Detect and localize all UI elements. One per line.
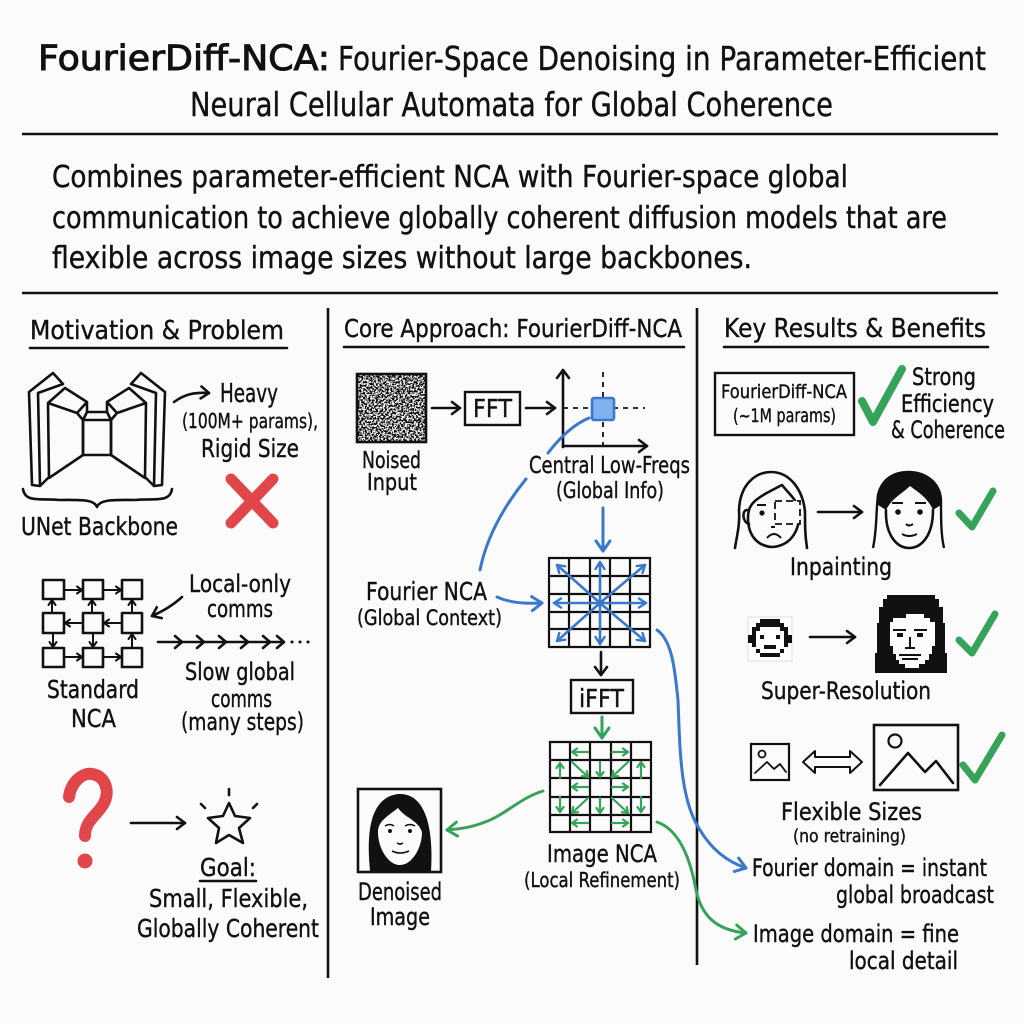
arrow [600,652,602,675]
summary text [52,160,947,276]
label: UNet Backbone: UNet Backbone [21,512,178,541]
callout: slow global comms: (many steps) [181,708,304,736]
callout: local-only comms [189,570,291,623]
box: FFT [465,392,520,425]
icon: check [959,491,993,527]
icon: red question mark [69,774,107,868]
summary text: flexible across image sizes without large backbones. [52,241,752,276]
goal text [137,853,319,943]
arrow [600,717,604,738]
label: Fourier NCA [357,577,502,630]
text: strong efficiency and coherence: Strong [912,363,976,391]
image: denoised portrait [358,789,441,872]
arrow [810,636,855,638]
callout: local-only comms: Local-only [189,570,291,598]
callout: slow global comms: comms [211,685,272,713]
arrow [432,407,460,409]
label: noised input: Noised [362,448,421,474]
callout: Image domain: local detail [849,947,958,975]
label: Fourier NCA: Fourier NCA [366,577,487,606]
callout: Image domain [753,920,959,975]
heading: core approach: Core Approach: FourierDiff-NCA [344,314,682,343]
label: noised input [362,448,421,496]
icon: check [963,735,1002,780]
image: noised input [357,374,426,442]
icon: pixel face high resolution [875,595,947,673]
label: central low-freqs [529,453,690,504]
heading: motivation and problem: Motivation & Problem [30,316,284,346]
arrow [818,511,862,513]
heading: key results: Key Results & Benefits [724,314,986,344]
icon: UNet backbone [23,373,172,507]
title: FourierDiff-NCA: [38,39,330,79]
chart: frequency axes [563,370,647,447]
label: Fourier NCA: (Global Context) [357,606,502,630]
goal text: Globally Coherent [137,914,319,943]
icon: star [201,789,257,843]
box: FourierDiff-NCA params: (~1M params) [733,405,836,427]
arrow: to goal [131,822,185,824]
callout: heavy and rigid: Heavy [220,379,278,409]
icon: red cross [231,479,273,523]
label: Image NCA [524,840,680,892]
blue callout arrow [657,630,746,868]
icon: restored face [873,472,944,548]
label: Standard NCA: Standard [47,675,139,704]
arrow [602,508,604,551]
goal text: Small, Flexible, [149,884,308,913]
icon: masked face [735,472,807,548]
label: super-resolution: Super-Resolution [761,677,931,705]
label: flexible sizes [781,798,922,847]
icon: check [959,614,995,653]
label: inpainting: Inpainting [790,553,892,581]
label: Standard NCA [47,675,139,733]
box: FourierDiff-NCA params: FourierDiff-NCA [721,381,847,403]
callout: slow global comms: Slow global [185,658,295,686]
text: strong efficiency and coherence: Efficiency [901,390,994,418]
diagram: Image NCA grid [550,742,651,832]
icon: large image [874,725,958,790]
label: Standard NCA: NCA [71,704,116,733]
box: FFT: FFT [473,394,513,423]
arrow [526,407,555,409]
label: noised input: Input [367,470,417,496]
callout: Fourier domain [752,854,994,909]
label: central low-freqs: (Global Info) [556,479,664,504]
text: strong efficiency and coherence [891,363,1005,444]
arrow: to grid [152,597,182,616]
panel: core approach [357,370,994,975]
callout: Image domain: Image domain = fine [753,920,959,948]
arrow chain: many steps [158,636,308,648]
title: Neural Cellular Automata for Global Coherence [190,85,833,124]
label: denoised image [358,878,442,931]
label: denoised image: Image [370,903,430,931]
label: Image NCA: (Local Refinement) [524,868,680,892]
arrow: to heavy [174,393,209,402]
label: flexible sizes: (no retraining) [793,826,906,847]
arrow [497,597,542,603]
callout: local-only comms: comms [207,595,273,623]
icon: small image [751,744,789,780]
icon: double arrow [803,751,862,773]
icon: check [862,369,902,422]
label: flexible sizes: Flexible Sizes [781,798,922,826]
label: Image NCA: Image NCA [547,840,657,868]
callout: heavy and rigid: (100M+ params), [182,409,318,433]
callout: heavy and rigid [182,379,318,463]
diagram: Fourier NCA grid [549,558,650,647]
blue link: low freqs to Fourier NCA [480,418,589,570]
callout: heavy and rigid: Rigid Size [201,434,299,463]
title [38,39,986,124]
panel: motivation and problem [21,373,319,943]
callout: slow global comms [181,658,304,736]
diagram: standard NCA grid [43,580,142,667]
panel: key results [715,363,1005,847]
box: FourierDiff-NCA params [715,373,854,435]
green callout arrow [657,822,746,933]
goal text: Goal: [200,853,256,882]
icon: pixel face low resolution [748,617,792,661]
arrow: to denoised image [447,791,543,830]
label: central low-freqs: Central Low-Freqs [529,453,690,479]
summary text: Combines parameter-efficient NCA with Fourier-space global [52,160,848,195]
label: denoised image: Denoised [358,878,442,906]
box: iFFT: iFFT [579,684,625,713]
